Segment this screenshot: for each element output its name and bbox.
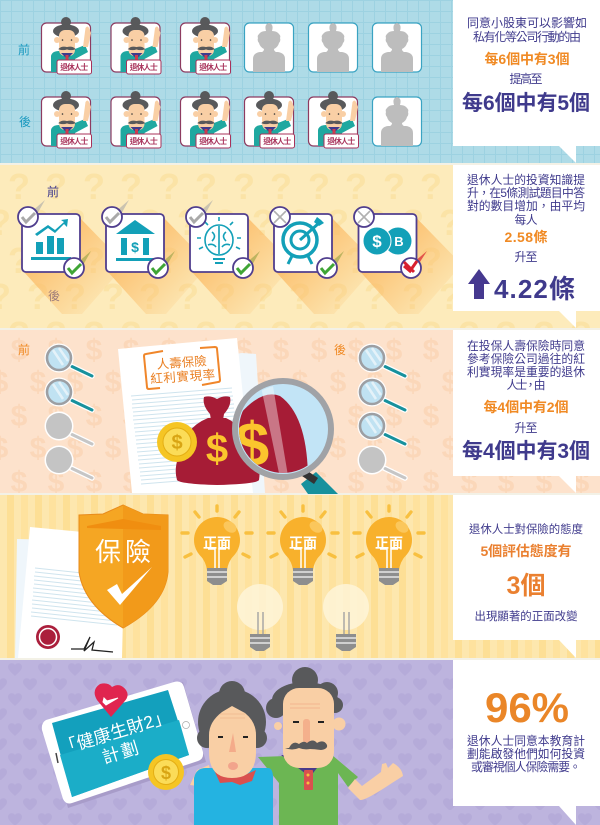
- icon: brain bulb: [186, 200, 285, 314]
- icon: up arrow: [468, 269, 490, 299]
- callout: shareholder result: 每6個中有3個: [484, 51, 570, 67]
- callout: knowledge result: [453, 165, 600, 328]
- icon: gold coin: [157, 422, 197, 462]
- callout: bonus result: 每4個中有3個: [462, 440, 590, 463]
- icon: target: [270, 207, 369, 314]
- panel: attitude to insurance: [0, 495, 600, 658]
- icon: tablet: 計劃: [100, 737, 143, 768]
- callout: shareholder result: [453, 0, 600, 163]
- illustration: man: [258, 667, 403, 825]
- icon: tablet: 「健康生財2」: [57, 706, 173, 759]
- icons: after row, 5 of 6: [42, 91, 422, 148]
- icons: positive lit bulbs: 正面: [375, 535, 403, 551]
- label: after row: 後: [19, 115, 31, 129]
- callout: bonus result: [453, 330, 600, 493]
- label: after: 後: [334, 343, 346, 357]
- callout: bonus result: 人士，由: [506, 378, 546, 392]
- icons: positive lit bulbs: 正面: [203, 535, 231, 551]
- icon: tablet: [42, 682, 206, 808]
- icon: shield: 保險: [95, 537, 151, 567]
- callout: bonus result: 升至: [514, 421, 538, 435]
- callout: attitude result: 出現顯著的正面改變: [474, 609, 578, 623]
- callout: approval result: 96%: [485, 684, 569, 731]
- callout: shareholder result: 同意小股東可以影響如: [467, 15, 587, 30]
- callout: knowledge result: 2.58條: [504, 229, 548, 245]
- callout: knowledge result: 升至: [514, 250, 538, 264]
- callout: attitude result: 退休人士對保險的態度: [469, 522, 583, 536]
- icon: large magnifier: $: [235, 411, 269, 480]
- callout: bonus result: 參考保險公司過往的紅: [467, 352, 585, 366]
- icons: magnifiers after: [358, 344, 405, 478]
- icon: heart check: [95, 683, 128, 717]
- callout: approval result: 劃能啟發他們如何投資: [467, 747, 585, 761]
- icon: money bag: [176, 396, 260, 485]
- label: before row: 前: [18, 42, 30, 57]
- callout: shareholder result: 私有化等公司行動的由: [473, 29, 581, 44]
- icon: money bag: $: [206, 427, 228, 471]
- icon: bank: [102, 200, 201, 314]
- icons: magnifiers before: [44, 344, 92, 478]
- icon: shield: [79, 505, 168, 628]
- callout: knowledge result: 對的數目增加，由平均: [467, 199, 585, 213]
- icon: dollar and bitcoin coins: [354, 207, 454, 314]
- callout: knowledge result: 升，在5條測試題目中答: [467, 186, 585, 200]
- callout: approval result: 退休人士同意本教育計: [467, 734, 585, 748]
- callout: bonus result: 利實現率是重要的退休: [467, 365, 585, 379]
- icon: bank: $: [131, 239, 139, 255]
- icons: positive lit bulbs: 正面: [289, 535, 317, 551]
- document: policy: [15, 527, 125, 658]
- label: after: 後: [48, 289, 60, 303]
- callout: knowledge result: 每人: [514, 213, 538, 227]
- callout: approval result: [453, 660, 600, 825]
- illustration: woman: [190, 681, 273, 825]
- callout: attitude result: [453, 495, 600, 658]
- icon: dollar and bitcoin coins: $: [372, 232, 382, 251]
- callout: shareholder result: 每6個中有5個: [462, 92, 590, 115]
- icon: coin: [148, 754, 184, 790]
- panel: programme approval: [0, 660, 600, 825]
- callout: approval result: 或審視個人保險需要。: [471, 760, 581, 774]
- panel: bonus realization: [0, 330, 600, 494]
- panel: investment knowledge: [0, 165, 600, 328]
- icon: gold coin: $: [171, 432, 183, 454]
- callout: knowledge result: 4.22條: [494, 274, 575, 304]
- callout: knowledge result: 退休人士的投資知識提: [467, 173, 585, 187]
- icons: positive lit bulbs: [182, 506, 424, 585]
- document: bonus fulfilment: 紅利實現率: [150, 367, 216, 386]
- label: before: 前: [18, 342, 30, 357]
- callout: shareholder result: 提高至: [510, 71, 542, 86]
- icons: before row, 3 of 6: [42, 17, 422, 74]
- callout: attitude result: 5個評估態度有: [480, 543, 572, 559]
- icons: unlit bulbs: [237, 584, 369, 651]
- icon: coin: $: [161, 763, 171, 783]
- callout: bonus result: 在投保人壽保險時同意: [467, 339, 585, 353]
- icon: dollar and bitcoin coins: B: [394, 234, 404, 249]
- document: bonus fulfilment: 人壽保險: [156, 353, 208, 372]
- icon: large magnifier: [232, 380, 338, 494]
- icon: chart: [18, 200, 117, 314]
- panel: shareholder influence: [0, 0, 600, 163]
- document: bonus fulfilment: [118, 338, 265, 493]
- label: before: 前: [47, 184, 59, 199]
- callout: bonus result: 每4個中有2個: [484, 399, 568, 415]
- callout: attitude result: 3個: [507, 572, 545, 600]
